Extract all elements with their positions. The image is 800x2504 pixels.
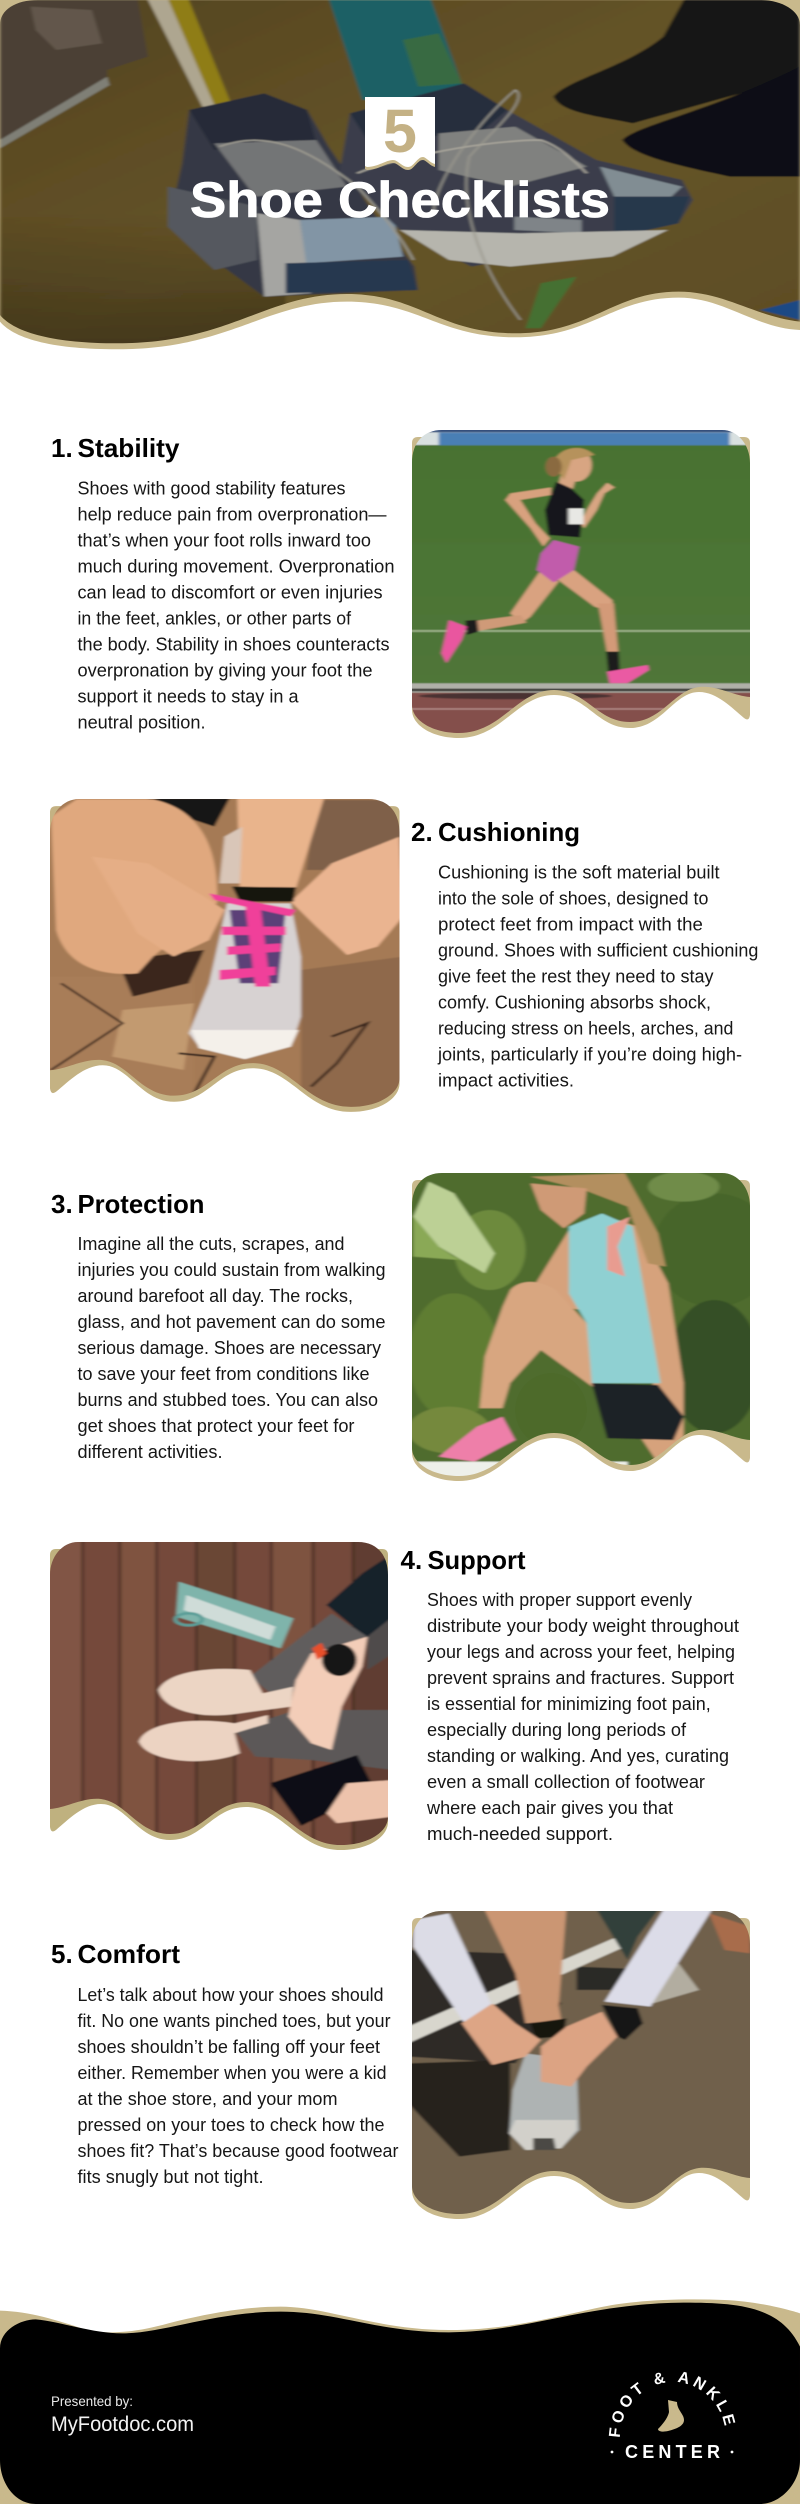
title: Shoe Checklists: [190, 172, 610, 228]
heading: Stability: 1.: [51, 433, 73, 463]
text block: Protection: injuries you could sustain from walking: [78, 1260, 386, 1280]
text block: Support: much-needed support.: [427, 1824, 613, 1844]
logo arc text: FOOT & ANKLE: [608, 2372, 736, 2437]
text block: Support: especially during long periods of: [427, 1720, 687, 1740]
text block: Support: your legs and across your feet, helping: [427, 1642, 735, 1662]
photo: woman stretching outdoors: [412, 1173, 750, 1476]
text block: Protection: Imagine all the cuts, scrapes, and: [78, 1234, 344, 1254]
badge white tag: [365, 97, 435, 167]
text block: Stability: support it needs to stay in a: [78, 686, 299, 706]
text block: Stability: help reduce pain from overpronation—: [78, 504, 386, 524]
heading: Protection: Protection: [78, 1189, 204, 1219]
text block: Stability: in the feet, ankles, or other parts of: [78, 608, 352, 628]
photo: runner on track: [408, 428, 755, 739]
header gold wave backing: [0, 0, 800, 349]
text block: Cushioning: reducing stress on heels, arches, and: [438, 1018, 733, 1038]
text block: Comfort: fits snugly but not tight.: [78, 2167, 264, 2187]
black boots: [554, 0, 800, 123]
text block: Comfort: shoes shouldn’t be falling off your feet: [78, 2037, 380, 2057]
logo center text: CENTER: [625, 2442, 720, 2462]
text block: Protection: different activities.: [78, 1442, 222, 1462]
text block: Support: standing or walking. And yes, curating: [427, 1746, 729, 1766]
section 5: Comfort: [51, 1908, 755, 2225]
text block: Support: prevent sprains and fractures. Support: [427, 1668, 734, 1688]
photo: seated flat-lay with bottle, shoes and phone: [46, 1540, 393, 1853]
footer black wave panel: [0, 2303, 800, 2504]
text block: Stability: the body. Stability in shoes counteracts: [78, 634, 390, 654]
text block: Support: even a small collection of footwear: [427, 1772, 705, 1792]
text block: Protection: glass, and hot pavement can do some: [78, 1312, 386, 1332]
gold wave frame 5: [412, 1918, 750, 2219]
section 2: Cushioning: [46, 797, 758, 1117]
text block: Support: where each pair gives you that: [426, 1798, 673, 1818]
text block: Cushioning: Cushioning is the soft material built: [438, 862, 720, 882]
heading: Stability: Stability: [78, 433, 180, 463]
text block: Stability: much during movement. Overpronation: [78, 556, 394, 576]
heading: Comfort: Comfort: [78, 1939, 180, 1969]
photo: tying pink laces: [46, 797, 403, 1117]
text block: Cushioning: give feet the rest they need to stay: [438, 966, 714, 986]
website: MyFootdoc.com: [51, 2413, 194, 2436]
presented by label: Presented by:: [51, 2393, 133, 2409]
text block: Comfort: either. Remember when you were a kid: [78, 2063, 386, 2083]
text block: Stability: Shoes with good stability features: [78, 478, 346, 498]
text block: Support: [426, 1590, 739, 1844]
logo dots: [611, 2451, 733, 2453]
text block: Stability: that’s when your foot rolls inward too: [78, 530, 371, 550]
text block: Cushioning: comfy. Cushioning absorbs shock,: [438, 992, 711, 1012]
text block: Protection: get shoes that protect your feet for: [78, 1416, 354, 1436]
badge gold trim: [365, 97, 435, 170]
text block: Protection: to save your feet from conditions like: [78, 1364, 370, 1384]
badge number: 5: [383, 97, 417, 165]
heading: Support: Support: [428, 1545, 526, 1575]
gold wave frame 3: [412, 1180, 750, 1481]
text block: Cushioning: joints, particularly if you’re doing high-: [437, 1044, 742, 1064]
text block: Comfort: Let’s talk about how your shoes should: [78, 1985, 384, 2005]
text block: Protection: [78, 1234, 386, 1462]
section 1: Stability: [51, 428, 755, 739]
heading: Comfort: 5.: [51, 1939, 73, 1969]
text block: Comfort: pressed on your toes to check how the: [78, 2115, 384, 2135]
header photo: running shoes on gym floor: [0, 0, 800, 353]
text block: Stability: [78, 478, 394, 732]
text block: Stability: can lead to discomfort or even injuries: [78, 582, 382, 602]
gold wave frame 2: [50, 806, 399, 1112]
footer gold backing: [0, 2299, 800, 2504]
text block: Cushioning: into the sole of shoes, designed to: [438, 888, 708, 908]
heading: Support: 4.: [400, 1545, 422, 1575]
text block: Cushioning: protect feet from impact with the: [438, 914, 703, 934]
text block: Comfort: fit. No one wants pinched toes, but your: [78, 2011, 391, 2031]
text block: Cushioning: impact activities.: [438, 1070, 574, 1090]
text block: Support: distribute your body weight throughout: [427, 1616, 739, 1636]
text block: Comfort: shoes fit? That’s because good footwear: [78, 2141, 398, 2161]
text block: Cushioning: [437, 862, 758, 1090]
text block: Comfort: at the shoe store, and your mom: [78, 2089, 338, 2109]
number badge: [365, 97, 435, 170]
text block: Protection: serious damage. Shoes are necessary: [78, 1338, 381, 1358]
text block: Comfort: [78, 1985, 398, 2187]
text block: Support: is essential for minimizing foot pain,: [427, 1694, 711, 1714]
photo: tying running shoe on asphalt: [408, 1908, 755, 2225]
left shoe: [176, 111, 418, 296]
text block: Stability: neutral position.: [78, 712, 206, 732]
heading: Protection: 3.: [51, 1189, 73, 1219]
text block: Cushioning: ground. Shoes with sufficient cushioning: [438, 940, 758, 960]
text block: Support: Shoes with proper support evenly: [427, 1590, 692, 1610]
right shoe: [340, 110, 694, 266]
header banner: [0, 0, 800, 353]
text block: Protection: around barefoot all day. The rocks,: [78, 1286, 353, 1306]
gold wave frame 4: [50, 1549, 388, 1850]
heading: Cushioning: 2.: [411, 817, 433, 847]
gold wave frame 1: [412, 437, 750, 738]
section 4: Support: [46, 1540, 739, 1853]
heading: Cushioning: Cushioning: [438, 817, 580, 847]
footer: [0, 2299, 800, 2504]
logo foot icon: [658, 2400, 684, 2432]
text block: Stability: overpronation by giving your foot the: [78, 660, 373, 680]
text block: Protection: burns and stubbed toes. You can also: [78, 1390, 378, 1410]
section 3: Protection: [51, 1170, 776, 1488]
logo: Foot & Ankle Center: [608, 2372, 736, 2462]
